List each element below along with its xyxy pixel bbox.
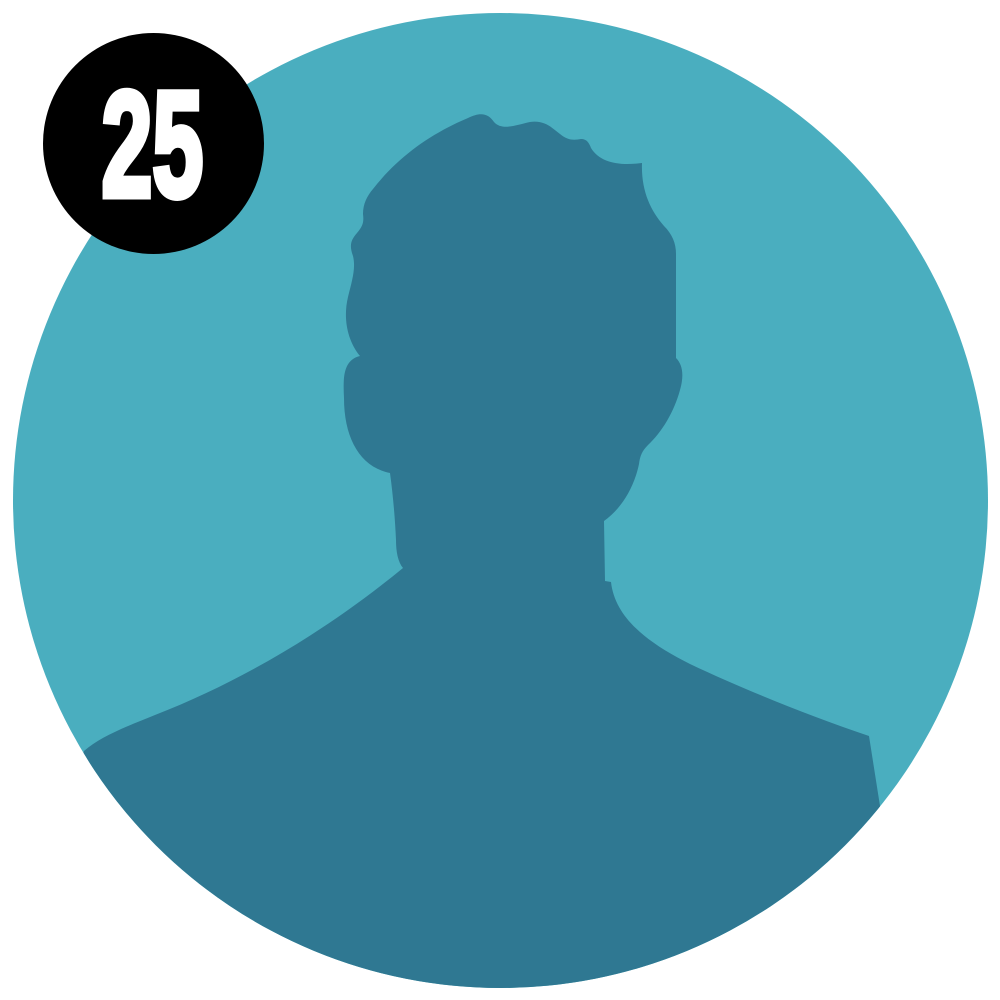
badge number: 25	[102, 62, 203, 229]
badge circle	[43, 33, 264, 254]
number badge	[43, 33, 264, 254]
icon: person silhouette	[84, 114, 880, 988]
